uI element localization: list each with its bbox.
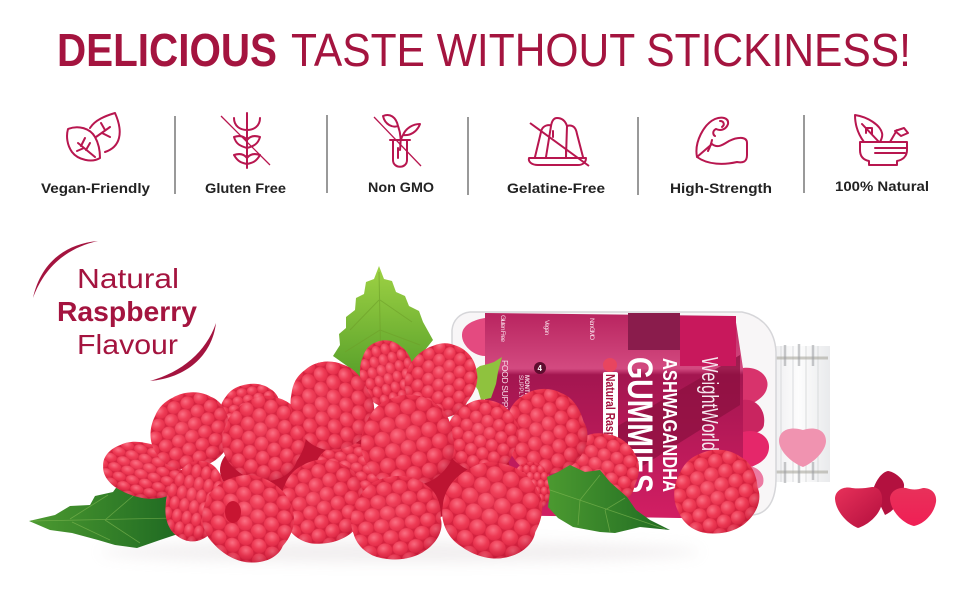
leaf: top [333, 266, 433, 378]
title: DELICIOUS [57, 24, 277, 76]
ground shadow [100, 542, 700, 562]
leaf: left [29, 478, 178, 548]
feature row [41, 113, 929, 196]
heart gummies [835, 471, 936, 528]
label: Gelatine-Free: Gelatine-Free [507, 180, 605, 196]
icon: gluten free wheat [221, 113, 270, 168]
raspberry pile [97, 330, 647, 577]
icon: vegan leaves [67, 113, 120, 160]
callout: natural raspberry flavour: Flavour [77, 329, 178, 360]
brand text: WeightWorld [697, 357, 723, 451]
four month badge: 4 [538, 364, 542, 373]
bottle neck [773, 344, 830, 483]
glass body [452, 312, 776, 515]
pink panel [680, 316, 736, 366]
small label text: Non GMO [588, 318, 595, 340]
title: TASTE WITHOUT STICKINESS! [291, 24, 911, 76]
shaded gaps between the berries [220, 415, 510, 525]
four month badge [534, 362, 546, 374]
gummies inside [462, 318, 769, 491]
icon: non GMO plant in tube [374, 115, 421, 167]
label: 100% Natural: 100% Natural [835, 178, 929, 194]
product name: ASHWAGANDHA [658, 358, 680, 492]
title [57, 24, 911, 76]
flavour pill: Natural Raspberry [603, 374, 617, 464]
icon: mortar and herbs [855, 115, 908, 165]
leaf: behind bottle [473, 357, 502, 400]
bottle label [485, 313, 743, 519]
small label text: SUPPLY [517, 375, 523, 398]
label: High-Strength: High-Strength [670, 180, 772, 196]
product bottle [452, 312, 830, 519]
small label text: MONTHS [523, 375, 529, 401]
callout: natural raspberry flavour [33, 241, 216, 381]
label: Gluten Free: Gluten Free [205, 180, 286, 196]
icon: flexed arm [696, 118, 747, 164]
bottle label: GUMMIES [620, 357, 659, 493]
heart gummy in the neck [779, 428, 826, 467]
label: Non GMO: Non GMO [368, 179, 434, 195]
raspberry: front of bottle [664, 441, 768, 543]
dark square [628, 313, 680, 350]
dark diagonal band [585, 355, 740, 480]
small label text: Vegan [543, 320, 550, 335]
leaf: right [547, 465, 670, 533]
small label text [499, 315, 595, 440]
label: Vegan-Friendly: Vegan-Friendly [41, 180, 150, 196]
small label text: Gluten Free [499, 315, 506, 342]
small label text: FOOD SUPPLEMENT [500, 360, 510, 440]
callout: natural raspberry flavour: Raspberry [57, 296, 197, 327]
icon: gelatine free jelly [529, 118, 589, 166]
callout: natural raspberry flavour: Natural [77, 263, 179, 294]
